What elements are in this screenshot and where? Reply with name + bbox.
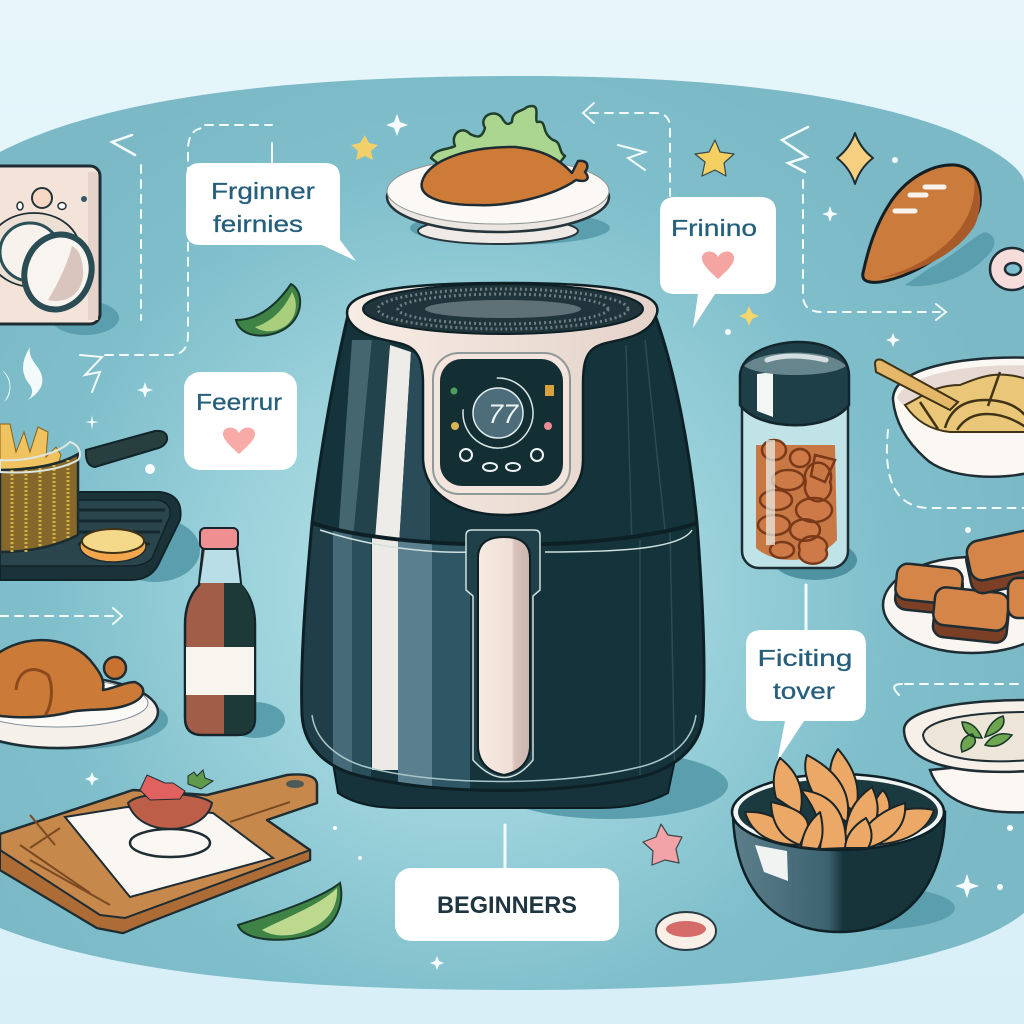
icon: pink star xyxy=(643,824,682,865)
icon: heart xyxy=(702,251,734,279)
handle xyxy=(466,530,540,778)
icon: sauce bottle xyxy=(185,528,285,738)
icon: radish slice xyxy=(656,912,716,950)
icon: cutting board with dish xyxy=(0,770,317,933)
callout: Ficiting tover: Ficiting xyxy=(758,645,852,671)
beige collar around control panel xyxy=(347,283,657,515)
callout: Feerrur xyxy=(184,372,297,470)
air fryer base xyxy=(330,745,678,808)
fryer shadow xyxy=(492,751,728,819)
air fryer lower body xyxy=(303,526,703,788)
air fryer outlines xyxy=(302,315,704,790)
icon: bowl of fries xyxy=(732,749,955,932)
display dial xyxy=(450,365,546,461)
callout: Frinino: Frinino xyxy=(671,215,757,241)
icon: jar of snacks xyxy=(740,342,857,580)
icon: noodle bowl xyxy=(875,358,1024,477)
icon: small yellow sparkle xyxy=(739,306,759,326)
control panel xyxy=(433,353,570,494)
callout: BEGINNERS: BEGINNERS xyxy=(437,892,577,919)
icon: roasted sweet potato xyxy=(863,165,994,286)
icon: pickle xyxy=(236,284,300,336)
air fryer xyxy=(295,283,728,819)
icon: yellow diamond sparkle xyxy=(837,133,873,184)
callout: Frginner feirnies: feirnies xyxy=(213,211,303,237)
icon: pink ring xyxy=(990,248,1024,290)
display dial: 77 xyxy=(488,399,519,429)
icon: heart xyxy=(223,427,255,454)
icon: appliance with dial xyxy=(0,166,119,335)
air fryer upper body xyxy=(314,320,696,542)
icon: dip cup xyxy=(904,700,1024,812)
icon: roast chicken on plate xyxy=(0,640,168,750)
icon: yellow star left xyxy=(351,135,378,160)
icon: yellow star right xyxy=(695,140,734,176)
callout: Ficiting tover: tover xyxy=(773,678,835,704)
icon: toast on plate xyxy=(883,528,1024,653)
icon: plated fish with lettuce xyxy=(387,106,610,245)
icon: sliced cucumber xyxy=(238,883,341,940)
callout: Feerrur: Feerrur xyxy=(196,389,282,415)
callout: BEGINNERS xyxy=(395,868,619,941)
decorative sparkles xyxy=(85,114,1013,970)
callout: Frginner feirnies: Frginner xyxy=(211,178,315,204)
air fryer vent grill xyxy=(363,284,643,334)
callout: Ficiting tover xyxy=(746,630,866,762)
callout: Frinino xyxy=(660,197,776,328)
dashed connectors xyxy=(0,103,1024,870)
callout: Frginner feirnies xyxy=(186,163,356,261)
icon: fryer basket on stove xyxy=(0,347,200,582)
